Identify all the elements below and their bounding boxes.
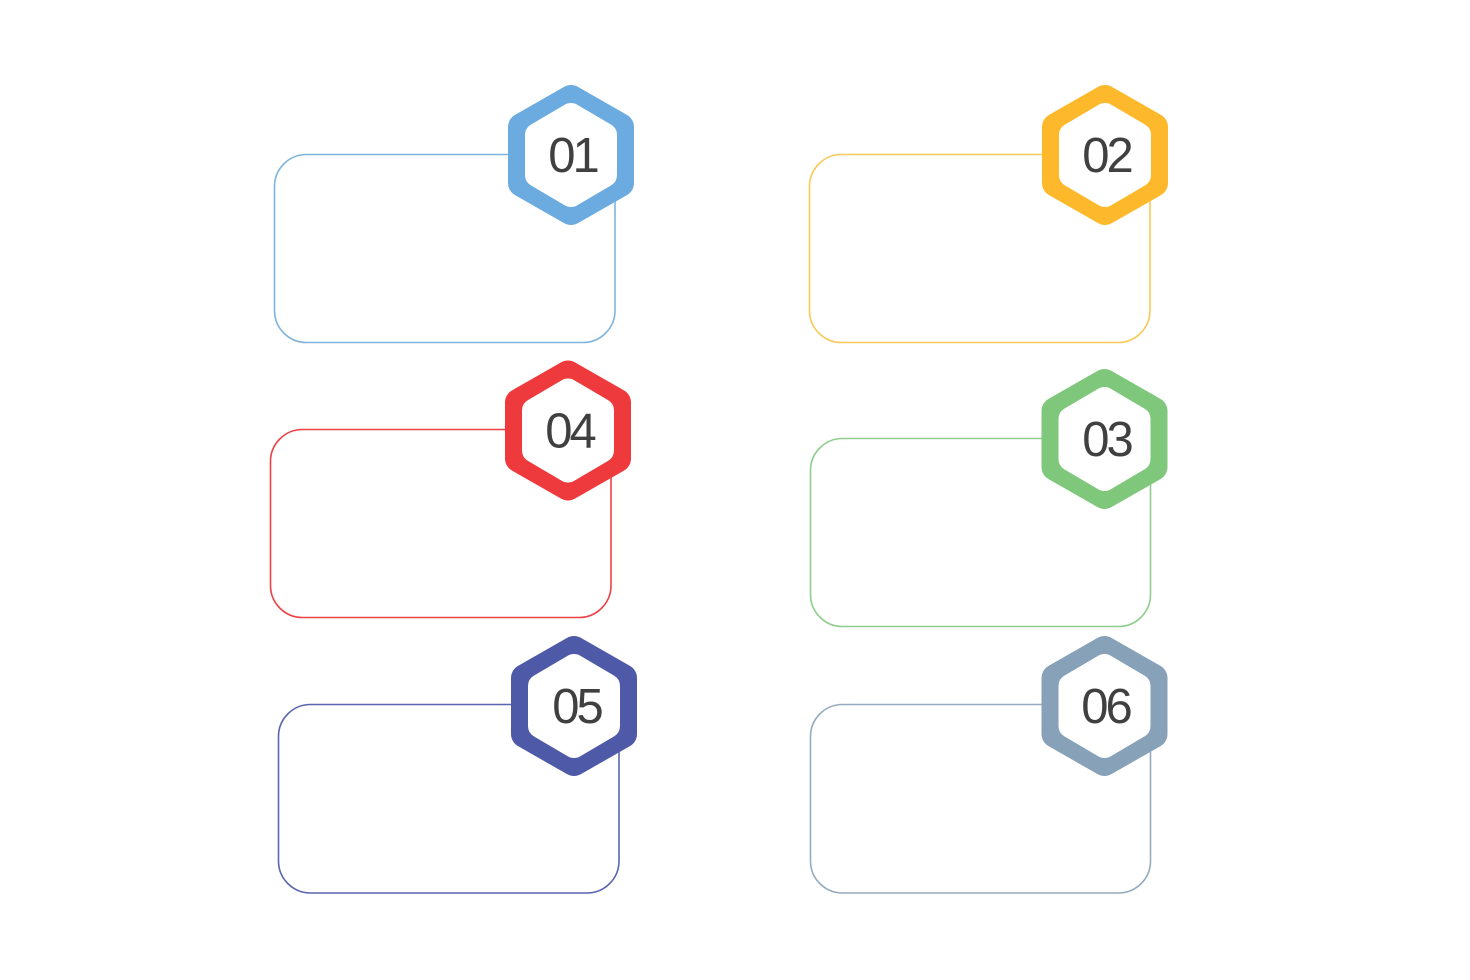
- number 04: 04: [545, 404, 595, 458]
- panel 06: slate box: [810, 650, 1154, 893]
- outline box 02: [810, 154, 1150, 342]
- outline box 04: [270, 430, 611, 618]
- number 03: 03: [1082, 413, 1132, 467]
- panel 01: blue box: [274, 99, 620, 342]
- panel 03: green box: [810, 383, 1154, 626]
- outline box 01: [274, 154, 615, 342]
- outline box 05: [278, 704, 619, 893]
- hexagon badge 05: [525, 650, 623, 762]
- panel 04: red box: [270, 374, 617, 618]
- number 02: 02: [1082, 129, 1131, 183]
- hexagon badge 04: [519, 374, 617, 486]
- number 06: 06: [1081, 680, 1131, 734]
- number 05: 05: [552, 680, 602, 734]
- hexagon badge 03: [1056, 383, 1154, 495]
- panel 02: yellow box: [810, 99, 1154, 342]
- hexagon badge 01: [522, 99, 620, 211]
- hexagon badge 02: [1056, 99, 1154, 211]
- panel 05: indigo box: [278, 650, 623, 893]
- number 01: 01: [548, 129, 597, 183]
- hexagon badge 06: [1056, 650, 1154, 762]
- outline box 03: [810, 438, 1150, 626]
- outline box 06: [810, 704, 1150, 893]
